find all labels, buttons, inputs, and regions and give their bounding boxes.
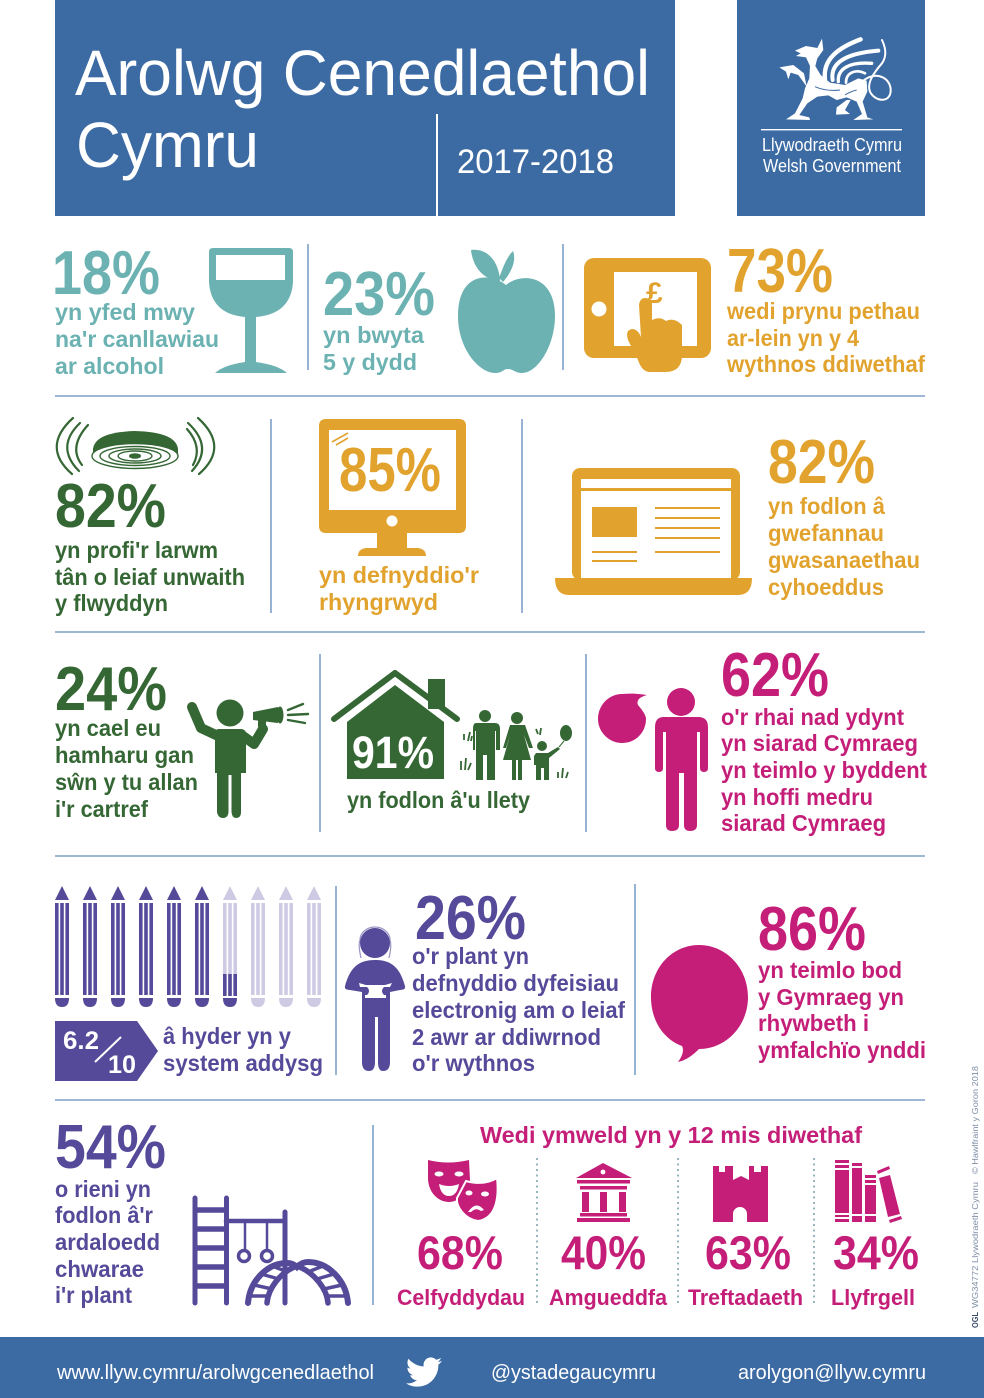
badge: 6.2 out of 10: 10 (108, 1051, 136, 1079)
text block: yn yfed mwy (55, 299, 195, 325)
side credit (970, 1066, 980, 1328)
text block: o'r rhai nad ydynt (721, 704, 904, 730)
text block: wythnos ddiwethaf (726, 351, 925, 377)
percentage: 85% (339, 436, 441, 505)
percentage: 91% (352, 727, 434, 778)
text block: yn siarad Cymraeg (721, 730, 918, 756)
heading: Wedi ymweld yn y 12 mis diwethaf (480, 1122, 862, 1148)
text block (323, 322, 424, 375)
panel: children on devices (345, 884, 625, 1076)
logo wording: Llywodraeth Cymru (762, 135, 902, 155)
title (75, 37, 650, 181)
text block: electronig am o leiaf (412, 997, 625, 1023)
email: arolygon@llyw.cymru (738, 1362, 926, 1384)
text block: cyhoeddus (768, 574, 884, 600)
twitter handle: @ystadegaucymru (491, 1362, 656, 1384)
text block (726, 298, 925, 377)
text block: y Gymraeg yn (758, 984, 904, 1010)
text block: yn fodlon â (768, 493, 885, 519)
text block (55, 299, 219, 379)
title: Cymru (76, 109, 259, 181)
text block (319, 562, 479, 615)
text block: yn cael eu (55, 715, 161, 741)
panel: fruit and vegetables (323, 250, 555, 375)
icon: computer monitor (319, 419, 466, 556)
panel: proud of Welsh (651, 895, 926, 1063)
panel: alcohol (52, 239, 293, 379)
text block: o rieni yn (55, 1176, 151, 1202)
text block (55, 715, 198, 822)
icon: playground climbing frame (195, 1198, 348, 1303)
panel: cultural visits (397, 1122, 919, 1310)
percentage: 86% (758, 895, 866, 964)
text block: yn teimlo y byddent (721, 757, 927, 783)
percentage: 18% (52, 239, 160, 308)
text block (768, 493, 920, 600)
panel: play areas (55, 1113, 348, 1308)
icon: speech bubble and person (598, 688, 708, 831)
percentage: 82% (768, 428, 875, 497)
text block: ar-lein yn y 4 (727, 325, 859, 351)
panel: internet use (319, 419, 479, 615)
text block: ardaloedd (55, 1229, 160, 1255)
icon: books (835, 1160, 902, 1223)
badge: 6.2 out of 10 (55, 1021, 158, 1081)
panel: fire alarm (55, 418, 245, 616)
icon: house (334, 673, 457, 779)
caption: yn fodlon â'u llety (347, 787, 530, 813)
icon: museum (576, 1163, 632, 1222)
website: www.llyw.cymru/arolwgcenedlaethol (56, 1362, 374, 1384)
icon: dragon (779, 39, 891, 120)
icon: child with headphones and device (345, 927, 405, 1071)
text block: â hyder yn y (163, 1023, 291, 1049)
text block: gwasanaethau (768, 547, 920, 573)
text block: defnyddio dyfeisiau (412, 970, 619, 996)
panel: public service websites (555, 428, 920, 600)
percentage: 24% (55, 655, 167, 724)
text block: na'r canllawiau (55, 326, 219, 352)
side credit: © Hawlfraint y Goron 2018 (970, 1066, 980, 1174)
chart: pencils 6.2 out of 10 (55, 886, 321, 1007)
panel: Welsh Government logo (737, 0, 925, 216)
panel: education confidence (55, 886, 323, 1081)
percentage: 26% (415, 884, 526, 953)
text block: i'r cartref (55, 796, 148, 822)
text block: rhywbeth i (758, 1010, 869, 1036)
icon: person with megaphone (192, 700, 308, 818)
percentage: 73% (727, 237, 833, 306)
badge: 6.2 out of 10: 6.2 (63, 1027, 99, 1055)
text block: yn hoffi medru (721, 784, 873, 810)
label: arts: Celfyddydau (397, 1285, 525, 1310)
logo wording (762, 135, 902, 176)
text block: i'r plant (55, 1282, 132, 1308)
icon: wine glass (209, 248, 293, 373)
text block: gwefannau (768, 520, 884, 546)
text block: chwarae (55, 1256, 144, 1282)
text block: yn profi'r larwm (55, 537, 218, 563)
text block (721, 704, 927, 836)
icon: castle (713, 1166, 768, 1222)
text block (758, 957, 926, 1063)
icon: family with balloon (461, 710, 572, 780)
text block: 2 awr ar ddiwrnod (412, 1024, 601, 1050)
text block: rhyngrwyd (319, 589, 438, 615)
label: library: Llyfrgell (831, 1285, 915, 1310)
text block (163, 1023, 323, 1076)
percentage: museum: 40% (561, 1226, 646, 1279)
percentage: 82% (55, 472, 166, 541)
title: Arolwg Cenedlaethol (75, 37, 650, 109)
text block: yn bwyta (323, 322, 424, 348)
percentage: 54% (55, 1113, 166, 1182)
icon: tablet with pound sign and finger: £ (646, 277, 663, 310)
logo wording: Welsh Government (763, 156, 901, 176)
panel: noise (55, 655, 308, 822)
text block: yn defnyddio'r (319, 562, 479, 588)
percentage: 62% (721, 641, 829, 710)
icon: smoke alarm (57, 418, 214, 474)
icon: laptop (555, 468, 752, 595)
icon: apple (458, 250, 555, 373)
text block: o'r plant yn (412, 943, 529, 969)
text block: siarad Cymraeg (721, 810, 886, 836)
text block: ymfalchïo ynddi (758, 1037, 926, 1063)
text block: o'r wythnos (412, 1050, 535, 1076)
icon: twitter bird (406, 1357, 442, 1387)
percentage: arts: 68% (417, 1226, 503, 1279)
panel: housing satisfaction (334, 673, 572, 813)
text block: sŵn y tu allan (55, 769, 198, 795)
text block: yn teimlo bod (758, 957, 902, 983)
footer bar (0, 1337, 984, 1398)
text block: fodlon â'r (55, 1202, 153, 1228)
text block (55, 1176, 160, 1308)
icon: theatre masks (428, 1160, 498, 1221)
text block: 5 y dydd (323, 349, 417, 375)
label: heritage: Treftadaeth (688, 1285, 803, 1310)
panel: want to speak Welsh (598, 641, 927, 836)
panel: online shopping (584, 237, 925, 377)
text block: ar alcohol (55, 353, 164, 379)
survey year: 2017-2018 (457, 143, 614, 181)
side credit: OGL (971, 1312, 980, 1328)
percentage: library: 34% (833, 1226, 919, 1279)
panel: title banner (55, 0, 675, 216)
text block: tân o leiaf unwaith (55, 564, 245, 590)
text block: system addysg (163, 1050, 323, 1076)
text block (55, 537, 245, 616)
percentage: heritage: 63% (705, 1226, 791, 1279)
side credit: WG34772 Llywodraeth Cymru (970, 1182, 980, 1308)
icon: speech bubble (651, 945, 748, 1062)
text block: y flwyddyn (55, 590, 168, 616)
text block: wedi prynu pethau (726, 298, 920, 324)
text block (412, 943, 625, 1076)
icon: tablet with pound sign and finger (584, 258, 711, 372)
label: museum: Amgueddfa (549, 1285, 668, 1310)
text block: hamharu gan (55, 742, 194, 768)
percentage: 23% (323, 260, 435, 329)
